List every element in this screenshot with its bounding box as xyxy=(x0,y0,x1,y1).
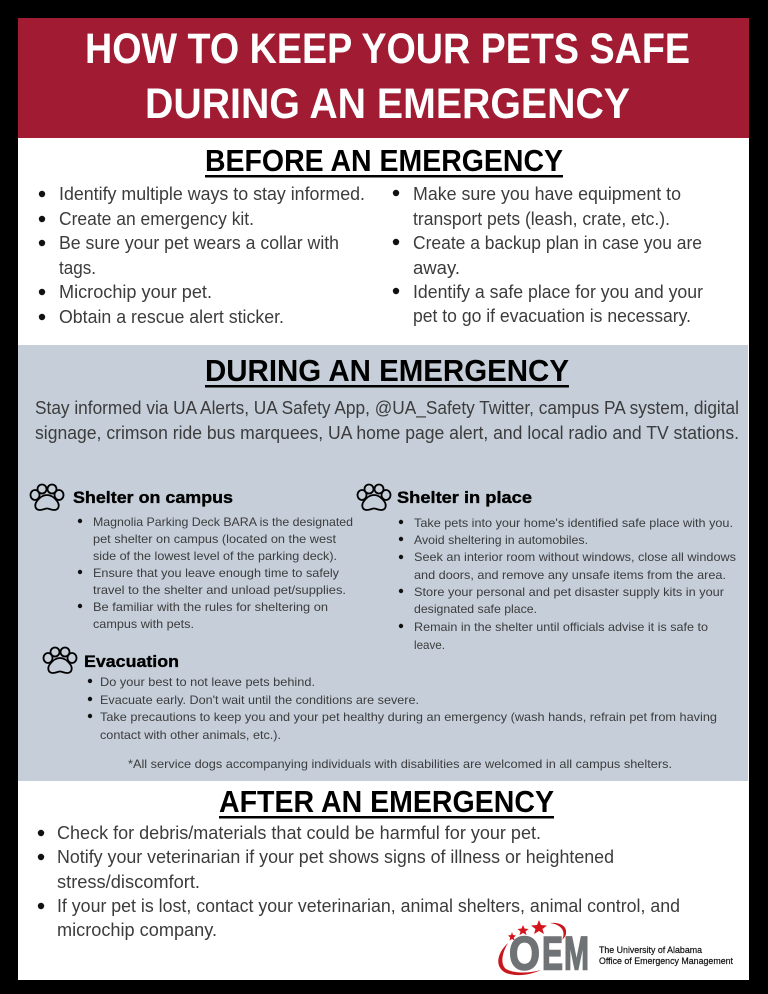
list: Ensure that you leave enough time to safely xyxy=(93,566,339,580)
footnote: *All service dogs accompanying individuals with disabilities are welcomed in all campus shelters. xyxy=(128,757,672,771)
list: Magnolia Parking Deck BARA is the designated xyxy=(93,515,353,529)
left checklist: Microchip your pet. xyxy=(59,282,212,302)
list: travel to the shelter and unload pet/supplies. xyxy=(93,583,346,597)
list: Avoid sheltering in automobiles. xyxy=(414,533,588,547)
list xyxy=(88,675,717,742)
logo caption xyxy=(599,945,733,966)
right checklist: pet to go if evacuation is necessary. xyxy=(413,306,691,326)
list: Take pets into your home's identified safe place with you. xyxy=(414,516,733,530)
list: designated safe place. xyxy=(414,602,537,616)
list: Take precautions to keep you and your pet healthy during an emergency (wash hands, refrain pet from having xyxy=(100,710,717,724)
heading: during: DURING AN EMERGENCY xyxy=(205,353,569,388)
list: side of the lowest level of the parking deck). xyxy=(93,549,337,563)
list: Be familiar with the rules for sheltering on xyxy=(93,600,328,614)
subheading: Shelter in place xyxy=(397,488,532,507)
checklist: stress/discomfort. xyxy=(57,872,200,892)
logo letters: M xyxy=(564,926,589,980)
logo letters xyxy=(509,926,589,980)
subsection: shelter on campus xyxy=(30,484,353,631)
left checklist xyxy=(39,184,365,327)
list: and doors, and remove any unsafe items from the area. xyxy=(414,568,726,582)
right checklist: Make sure you have equipment to xyxy=(413,184,681,204)
subheading: Evacuation xyxy=(84,652,179,671)
checklist: Notify your veterinarian if your pet shows signs of illness or heightened xyxy=(57,847,614,867)
panel: after an emergency xyxy=(38,784,680,940)
checklist xyxy=(38,823,680,940)
icon: paw xyxy=(30,484,64,510)
checklist: microchip company. xyxy=(57,920,217,940)
logo caption: Office of Emergency Management xyxy=(599,956,733,966)
logo caption: The University of Alabama xyxy=(599,945,702,955)
logo stars xyxy=(508,920,547,940)
title: DURING AN EMERGENCY xyxy=(145,80,630,128)
list: pet shelter on campus (located on the west xyxy=(93,532,337,546)
left checklist: Create an emergency kit. xyxy=(59,209,254,229)
left checklist: Be sure your pet wears a collar with xyxy=(59,233,339,253)
checklist: If your pet is lost, contact your veterinarian, animal shelters, animal control, and xyxy=(57,896,680,916)
OEM logo xyxy=(498,920,733,980)
left checklist: Identify multiple ways to stay informed. xyxy=(59,184,365,204)
icon: paw xyxy=(44,648,76,673)
checklist: Check for debris/materials that could be harmful for your pet. xyxy=(57,823,541,843)
list xyxy=(78,515,353,631)
subheading: Shelter on campus xyxy=(73,488,233,507)
icon: paw xyxy=(358,484,390,510)
logo letters: O xyxy=(509,926,540,980)
logo letters: E xyxy=(542,926,563,980)
title xyxy=(85,25,690,128)
left checklist: tags. xyxy=(59,258,96,278)
right checklist: transport pets (leash, crate, etc.). xyxy=(413,209,670,229)
right checklist xyxy=(393,184,703,326)
list: Store your personal and pet disaster supply kits in your xyxy=(414,585,724,599)
heading: before: BEFORE AN EMERGENCY xyxy=(205,143,563,178)
right checklist: away. xyxy=(413,258,460,278)
list: campus with pets. xyxy=(93,617,194,631)
title: HOW TO KEEP YOUR PETS SAFE xyxy=(85,25,690,73)
panel: during an emergency xyxy=(18,345,748,781)
stay informed text xyxy=(35,398,739,443)
panel: before an emergency xyxy=(39,143,703,327)
list: contact with other animals, etc.). xyxy=(100,728,281,742)
header banner xyxy=(18,18,749,138)
heading: after: AFTER AN EMERGENCY xyxy=(219,784,554,819)
right checklist: Create a backup plan in case you are xyxy=(413,233,702,253)
stay informed text: signage, crimson ride bus marquees, UA home page alert, and local radio and TV stations. xyxy=(35,423,739,443)
list: Do your best to not leave pets behind. xyxy=(100,675,315,689)
subsection: shelter in place xyxy=(358,484,736,652)
left checklist: Obtain a rescue alert sticker. xyxy=(59,307,284,327)
list: Remain in the shelter until officials advise it is safe to xyxy=(414,620,708,634)
right checklist: Identify a safe place for you and your xyxy=(413,282,703,302)
subsection: evacuation xyxy=(44,648,717,742)
list xyxy=(399,516,736,652)
list: Evacuate early. Don't wait until the conditions are severe. xyxy=(100,693,419,707)
list: Seek an interior room without windows, close all windows xyxy=(414,550,736,564)
logo swoosh xyxy=(498,923,566,975)
list: leave. xyxy=(414,638,445,652)
stay informed text: Stay informed via UA Alerts, UA Safety App, @UA_Safety Twitter, campus PA system, digital xyxy=(35,398,739,419)
